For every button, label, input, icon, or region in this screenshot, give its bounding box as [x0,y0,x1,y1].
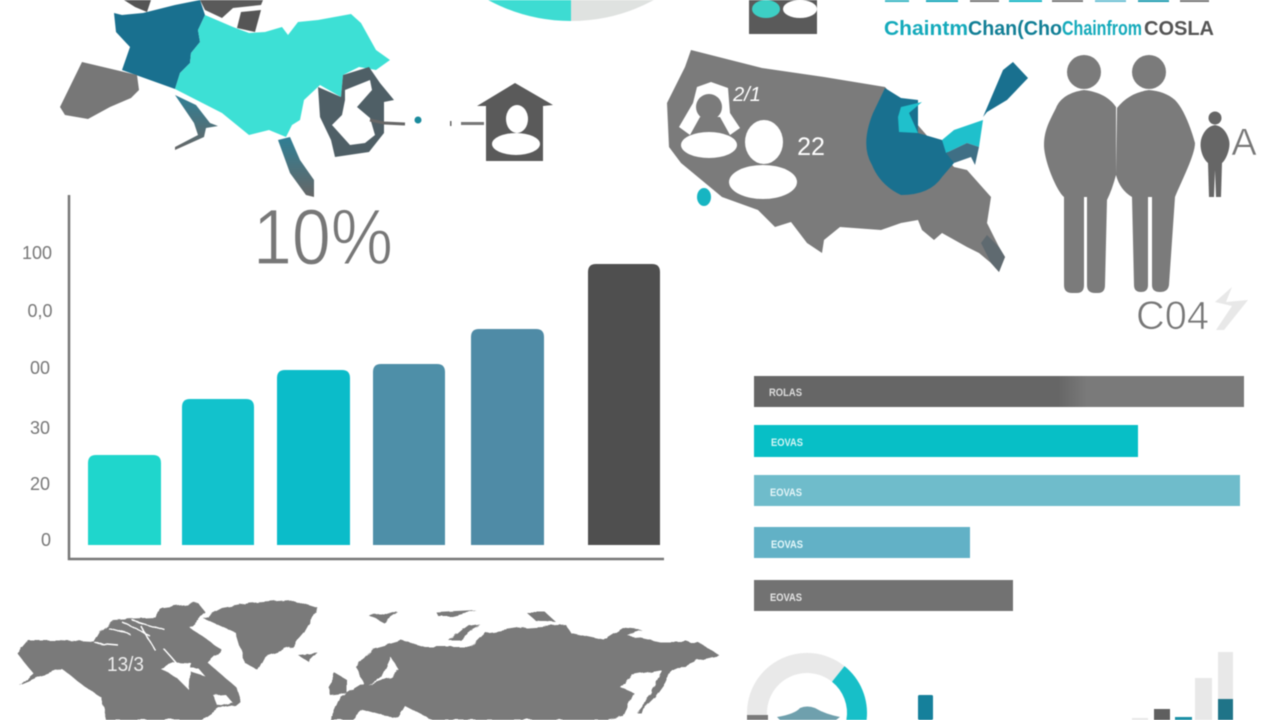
icon: house with person [477,83,553,161]
y axis labels: 20 [30,474,50,494]
label 204 with slash [1136,287,1248,338]
small bar chart: bottom centre [918,695,933,720]
label A: A [1231,122,1257,164]
horizontal bar chart [754,376,1244,611]
y axis labels [22,243,53,550]
world map [17,600,719,720]
horizontal bar chart: ROLAS [769,387,802,399]
small bar chart: bottom right [1132,652,1233,720]
map: europe regions [60,0,394,197]
icon: car in donut [777,706,840,720]
map: united states [667,50,1028,272]
horizontal bar chart: EOVAS [770,487,802,499]
people silhouettes [1044,55,1229,293]
world map label: 13/3 [107,654,144,676]
horizontal bar chart: EOVAS [771,437,803,449]
map label 2/1: 2/1 [732,84,761,106]
y axis labels: 00 [30,358,50,378]
top right heading text: Chan(Cho [968,18,1062,40]
icon: dark box with ellipses [749,0,817,34]
pie chart: top centre [488,0,654,21]
y axis labels: 30 [30,418,50,438]
top right heading text: Chaintm [884,18,968,40]
y axis labels: 0,0 [27,301,53,321]
top right heading text: Chainfrom [1062,18,1142,40]
map label 22: 22 [797,133,825,161]
horizontal bar chart: EOVAS [771,539,803,551]
marker: teal drop [697,188,711,206]
top right heading text: COSLA [1144,18,1214,40]
top right legend swatches [885,0,1209,2]
y axis labels: 0 [41,530,51,550]
bar chart [22,195,664,559]
top right heading text [884,18,1214,40]
donut chart: bottom [747,653,867,720]
connector line [370,116,484,126]
horizontal bar chart: EOVAS [770,592,802,604]
y axis labels: 100 [22,243,52,263]
big percentage 10%: 10% [253,192,393,281]
icon: woman on map [679,82,740,158]
label 204 with slash: C04 [1136,294,1209,338]
icon: man on map [729,120,797,199]
